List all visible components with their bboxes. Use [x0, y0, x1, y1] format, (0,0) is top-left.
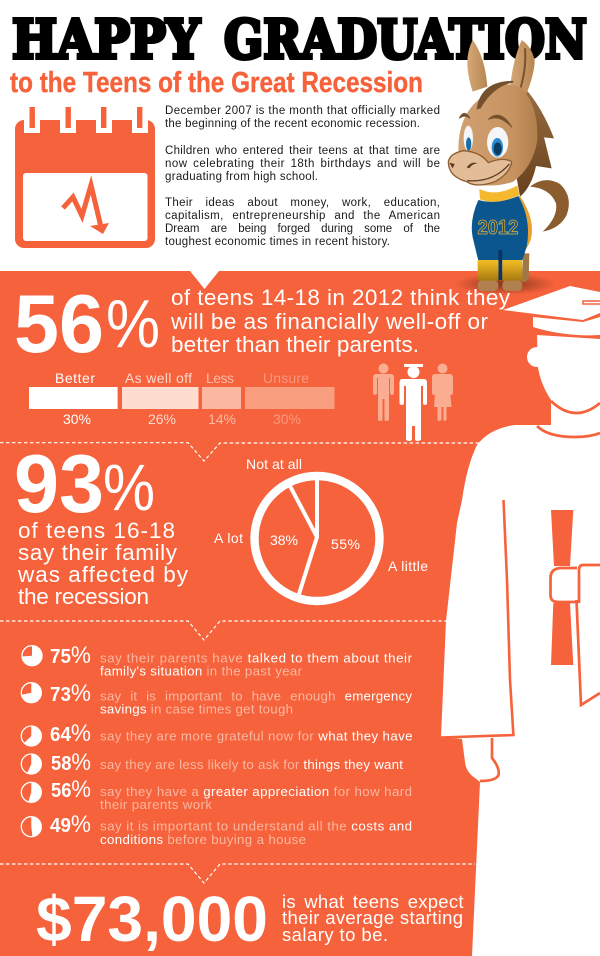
- stat row: 73%: 73%: [50, 680, 91, 707]
- title: HAPPY: [12, 9, 201, 71]
- dashed divider 3: [0, 864, 475, 883]
- dashed divider 1: [0, 443, 479, 461]
- text: family affected by recession: the recession: [18, 584, 149, 609]
- intro text: December 2007 is the month that officially marked: [165, 105, 440, 117]
- bar chart: better / as well off / less / unsure: Unsure: [263, 370, 309, 386]
- stat row: 75%: 75%: [50, 642, 91, 669]
- donkey mascot: 2012: [478, 216, 518, 239]
- bar chart: better / as well off / less / unsure: Better: [55, 370, 95, 386]
- intro text: Their ideas about money, work, education,: [165, 197, 440, 209]
- icon: family figures: [373, 364, 453, 441]
- bar chart: better / as well off / less / unsure: Less: [206, 370, 234, 386]
- donkey mascot: [448, 40, 569, 295]
- bar chart: better / as well off / less / unsure: 26%: [148, 411, 176, 427]
- stat row: 56%: their parents work: [100, 797, 212, 812]
- big stat 56%: %: [106, 286, 160, 362]
- stat row: 49%: [21, 811, 412, 847]
- headline: financially well-off: of teens 14-18 in 2012 think they: [171, 285, 511, 310]
- stat row: 56%: say they have a greater appreciation for how hard: [100, 784, 412, 799]
- big stat $73,000: $73,000: [36, 883, 268, 955]
- pie chart: family affected: A little: [388, 558, 428, 574]
- pie chart: family affected: 38%: [270, 532, 298, 548]
- intro text: graduating from high school.: [165, 171, 318, 183]
- stat row: 64%: [21, 720, 413, 747]
- subtitle: to the Teens of the Great Recession: [10, 67, 423, 99]
- text: starting salary: [282, 891, 464, 945]
- bar chart: better / as well off / less / unsure: 14%: [208, 411, 236, 427]
- big stat 93%: 93: [14, 437, 104, 530]
- graduate silhouette: [441, 286, 600, 956]
- stat row: 58%: [21, 749, 403, 776]
- bar chart: better / as well off / less / unsure: 30%: [63, 411, 91, 427]
- headline: financially well-off: better than their parents.: [171, 332, 419, 357]
- intro text: [165, 105, 440, 248]
- dashed divider 2: [0, 621, 446, 640]
- stat row: 56%: 56%: [51, 776, 91, 803]
- stat row: 73%: say it is important to have enough emergency: [100, 689, 412, 704]
- stat row: 75%: say their parents have talked to them about their: [100, 651, 413, 666]
- intro text: Dream are being forged during some of the: [165, 223, 440, 235]
- pie chart: family affected: A lot: [214, 530, 243, 546]
- bar chart: better / as well off / less / unsure: [29, 370, 334, 427]
- text: starting salary: salary to be.: [282, 924, 388, 945]
- pie chart: family affected: [214, 456, 428, 601]
- big stat 56%: 56: [14, 277, 104, 370]
- stat row: 58%: say they are less likely to ask for things they want: [100, 757, 403, 772]
- big stat 56%: [14, 277, 160, 370]
- stat row: 49%: 49%: [50, 811, 91, 838]
- text: starting salary: their average starting: [282, 907, 463, 928]
- orange background panel: [0, 271, 600, 956]
- stat row: 58%: 58%: [51, 749, 91, 776]
- intro text: the beginning of the recent economic recession.: [165, 118, 420, 130]
- stat row: 49%: say it is important to understand all the costs and: [100, 819, 412, 834]
- stat row: 75%: [22, 642, 413, 679]
- text: family affected by recession: say their family: [18, 540, 178, 565]
- stat row: 73%: savings in case times get tough: [100, 702, 293, 717]
- big stat 93%: %: [103, 450, 155, 524]
- big stat 93%: [14, 437, 155, 530]
- intro text: capitalism, entrepreneurship and the American: [165, 210, 440, 222]
- stat row: 75%: family's situation in the past year: [100, 664, 303, 679]
- white notch top: [190, 271, 219, 289]
- stat row: 64%: 64%: [50, 720, 91, 747]
- pie chart: family affected: Not at all: [246, 456, 302, 472]
- headline: financially well-off: [170, 285, 511, 357]
- text: family affected by recession: was affected by: [17, 562, 189, 587]
- text: family affected by recession: of teens 16-18: [18, 518, 175, 543]
- intro text: toughest economic times in recent history.: [165, 236, 390, 248]
- pie chart: family affected: 55%: [331, 536, 360, 552]
- bar chart: better / as well off / less / unsure: As well off: [125, 370, 192, 386]
- bar chart: better / as well off / less / unsure: 30%: [273, 411, 301, 427]
- intro text: now celebrating their 18th birthdays and will be: [165, 158, 440, 170]
- text: starting salary: is what teens expect: [282, 891, 464, 912]
- stat row: 64%: say they are more grateful now for what they have: [100, 729, 412, 744]
- intro text: Children who entered their teens at that time are: [165, 145, 440, 157]
- stat row: 56%: [21, 776, 412, 812]
- title: [12, 9, 587, 71]
- headline: financially well-off: will be as financially well-off or: [170, 309, 488, 334]
- stat row: 73%: [21, 680, 412, 717]
- stat row: 49%: conditions before buying a house: [100, 832, 306, 847]
- icon: calendar with falling chart: [15, 107, 155, 248]
- text: family affected by recession: [17, 518, 189, 609]
